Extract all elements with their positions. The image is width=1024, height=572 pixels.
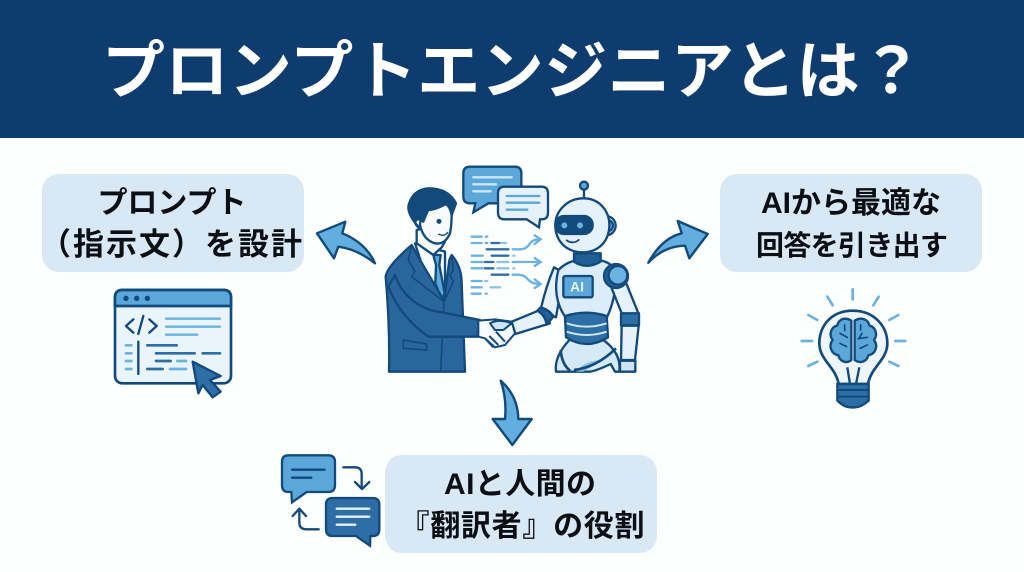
robot torso [556, 260, 615, 317]
panel: best answers from AI: 回答を引き出す [756, 230, 948, 261]
hair [408, 188, 456, 228]
header banner [0, 0, 1024, 138]
arrow: to best answers [648, 221, 708, 263]
panel: translator role: 『翻訳者』の役割 [400, 510, 644, 543]
robot [512, 182, 639, 372]
icon: light bulb with brain [802, 289, 905, 407]
panel: prompt design: （指示文）を設計 [40, 227, 302, 262]
robot shoulder [604, 264, 628, 288]
robot right arm [612, 283, 639, 314]
handshake [478, 319, 515, 347]
cursor [193, 362, 221, 397]
arrow: to translator role [493, 381, 532, 445]
AI badge [563, 276, 593, 297]
robot ear [596, 216, 616, 235]
robot head [555, 198, 609, 252]
panel: translator role: AIと人間の [444, 468, 596, 501]
central illustration [386, 167, 639, 372]
tie [433, 255, 445, 300]
title: プロンプトエンジニアとは？ [102, 37, 923, 107]
robot pelvis [556, 340, 620, 372]
brain [831, 319, 876, 362]
shirt [415, 243, 445, 300]
icon: speech bubbles [463, 167, 548, 227]
jacket [386, 245, 465, 372]
panel: best answers from AI: AIから最適な [761, 187, 941, 220]
robot forearm [512, 309, 550, 334]
panel: translator role [385, 455, 657, 553]
panel: prompt design [40, 174, 304, 272]
AI badge label: AI [570, 278, 584, 294]
businessman [386, 188, 480, 372]
robot waist [565, 313, 608, 344]
robot elbow [537, 307, 553, 325]
panel: best answers from AI [720, 174, 982, 272]
data flow lines [472, 235, 541, 294]
robot left upper arm [541, 267, 565, 317]
antenna [580, 190, 587, 199]
jacket sleeve [388, 275, 480, 337]
icon: exchange chat bubbles [282, 455, 379, 546]
robot visor [555, 216, 593, 234]
arrow: to prompt design [317, 222, 375, 263]
head and neck [417, 227, 445, 255]
panel: prompt design: プロンプト [97, 187, 247, 220]
robot neck [574, 253, 601, 266]
icon: code window [115, 290, 231, 397]
